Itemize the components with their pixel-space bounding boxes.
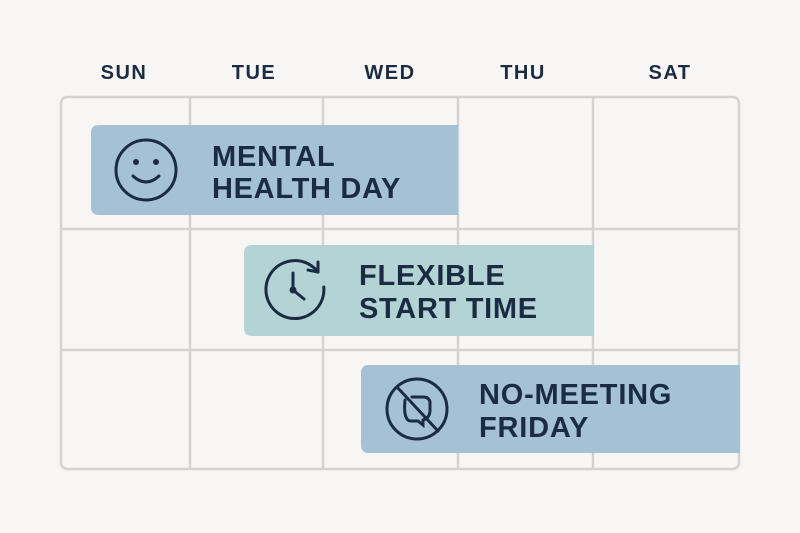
bar: mental health day: [91, 125, 458, 215]
bar: mental health day: HEALTH DAY: [212, 173, 401, 205]
icon: clock: [266, 261, 324, 319]
day headers: SUN: [101, 62, 147, 84]
bar: mental health day: MENTAL: [212, 141, 335, 173]
bar: no-meeting friday: NO-MEETING: [479, 379, 672, 411]
icon: smiley: [116, 140, 176, 200]
bar: flexible start time: [244, 245, 594, 336]
day headers: THU: [500, 62, 546, 84]
bar: no-meeting friday: [361, 365, 740, 453]
calendar grid: [61, 97, 739, 469]
bar: flexible start time: FLEXIBLE: [359, 260, 506, 292]
day headers: SAT: [648, 62, 692, 84]
bar: no-meeting friday: FRIDAY: [479, 412, 589, 444]
day headers: [101, 62, 692, 84]
icon: no meeting: [387, 379, 447, 439]
day headers: WED: [364, 62, 416, 84]
day headers: TUE: [232, 62, 276, 84]
bar: flexible start time: START TIME: [359, 293, 538, 325]
